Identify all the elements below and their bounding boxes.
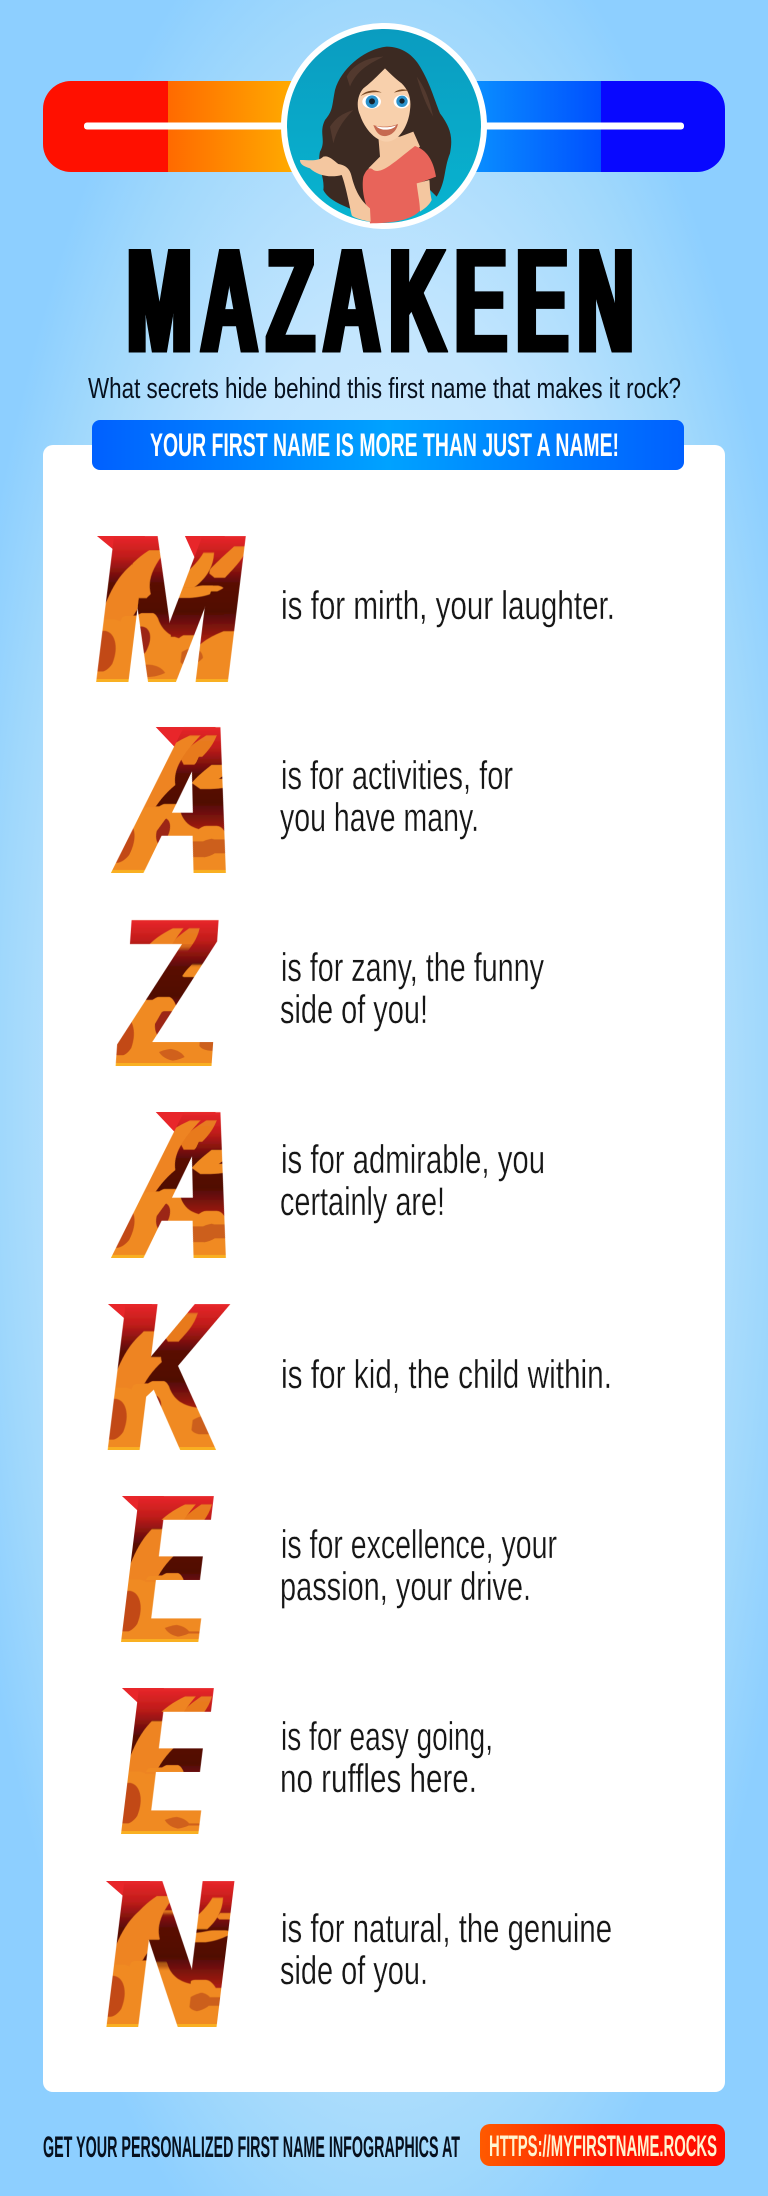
flame letter M: M (84, 491, 258, 728)
row 8: N (82, 1836, 612, 2073)
flame letter A: A (102, 1067, 269, 1303)
row 4: A: is for admirable, you (281, 1138, 545, 1182)
flame letter Z: Z (113, 874, 224, 1111)
top colour bar (43, 81, 725, 172)
row 7: E: is for easy going, (281, 1715, 493, 1759)
neck and chest (368, 132, 420, 177)
row 6: E (98, 1451, 557, 1688)
footer url button (480, 2124, 725, 2166)
hair (319, 47, 451, 210)
row 4: A: certainly are! (280, 1180, 445, 1224)
flame letter A: A (102, 682, 269, 918)
banner (92, 420, 684, 470)
row 3: Z: is for zany, the funny (281, 946, 544, 990)
shirt (363, 146, 436, 223)
row 2: A (102, 682, 513, 918)
row 6: E: is for excellence, your (281, 1523, 557, 1567)
portrait: smiling woman in circle (281, 23, 487, 229)
row 3: Z: side of you! (280, 988, 428, 1032)
face (358, 68, 410, 142)
row 6: E: passion, your drive. (280, 1565, 531, 1609)
row 8: N: side of you. (280, 1949, 428, 1993)
flame letter E: E (112, 1451, 221, 1688)
eyes (362, 95, 381, 109)
row 1: M (73, 491, 615, 728)
row 4: A (102, 1067, 545, 1303)
row 8: N: is for natural, the genuine (281, 1907, 612, 1951)
flame letter E (98, 1451, 221, 1688)
flame letter N: N (94, 1836, 246, 2073)
flame letter E: E (112, 1643, 221, 1880)
eyebrows (361, 89, 409, 96)
mouth (373, 124, 398, 136)
row 1: M: is for mirth, your laughter. (281, 584, 615, 628)
flame letter E (98, 1643, 221, 1880)
flame letter K: K (97, 1259, 236, 1496)
row 5: K: is for kid, the child within. (281, 1353, 612, 1397)
row 5: K (84, 1259, 612, 1496)
panel: white content area (43, 445, 725, 2092)
arm and hand (300, 156, 371, 222)
row 7: E (98, 1643, 493, 1880)
row 7: E: no ruffles here. (280, 1757, 477, 1801)
row 2: A: you have many. (280, 796, 479, 840)
row 3: Z (113, 874, 544, 1111)
row 2: A: is for activities, for (281, 754, 513, 798)
